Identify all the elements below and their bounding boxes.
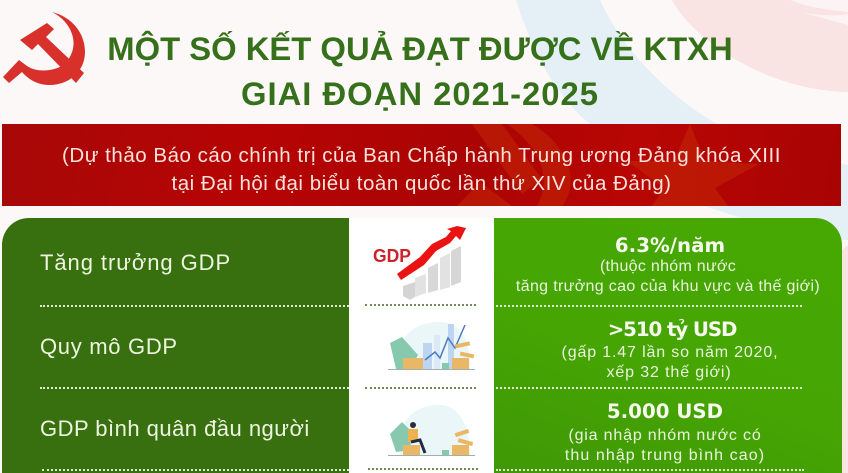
panel: white centre column	[349, 218, 494, 473]
icon: money and growth chart	[388, 322, 475, 370]
banner text	[62, 144, 781, 195]
label: GDP per capita: GDP bình quân đầu người	[40, 416, 310, 441]
panel: red banner	[2, 124, 841, 206]
value: growth rate: tăng trưởng cao của khu vực và thế giới)	[516, 278, 820, 294]
value: GDP size: >510 tỷ USD	[608, 318, 736, 341]
value: growth rate	[516, 234, 820, 294]
icon: faint emblem watermark	[458, 124, 758, 206]
value: GDP size	[562, 318, 778, 380]
panel: indicator names	[2, 218, 349, 473]
icon: GDP rising arrow: GDP	[373, 246, 411, 266]
icon: person sitting on coins	[388, 405, 475, 456]
title	[107, 30, 733, 112]
value: growth rate: (thuộc nhóm nước	[600, 258, 736, 275]
icon: hammer and sickle logo	[3, 12, 85, 85]
label: GDP size: Quy mô GDP	[40, 334, 178, 359]
icon: GDP rising arrow	[373, 226, 466, 300]
label: GDP growth: Tăng trưởng GDP	[40, 250, 231, 275]
banner text: tại Đại hội đại biểu toàn quốc lần thứ XIV của Đảng)	[171, 172, 672, 195]
banner text: (Dự thảo Báo cáo chính trị của Ban Chấp hành Trung ương Đảng khóa XIII	[62, 144, 781, 167]
value: per capita: (gia nhập nhóm nước có	[568, 427, 762, 444]
title: MỘT SỐ KẾT QUẢ ĐẠT ĐƯỢC VỀ KTXH	[107, 30, 733, 67]
value: GDP size: (gấp 1.47 lần so năm 2020,	[562, 344, 778, 361]
value: per capita	[565, 400, 765, 464]
value: per capita: 5.000 USD	[607, 400, 723, 423]
value: GDP size: xếp 32 thế giới)	[606, 364, 732, 380]
value: growth rate: 6.3%/năm	[615, 234, 725, 257]
value: per capita: thu nhập trung bình cao)	[565, 446, 765, 464]
panel: values	[494, 218, 842, 473]
title: GIAI ĐOẠN 2021-2025	[241, 75, 599, 112]
